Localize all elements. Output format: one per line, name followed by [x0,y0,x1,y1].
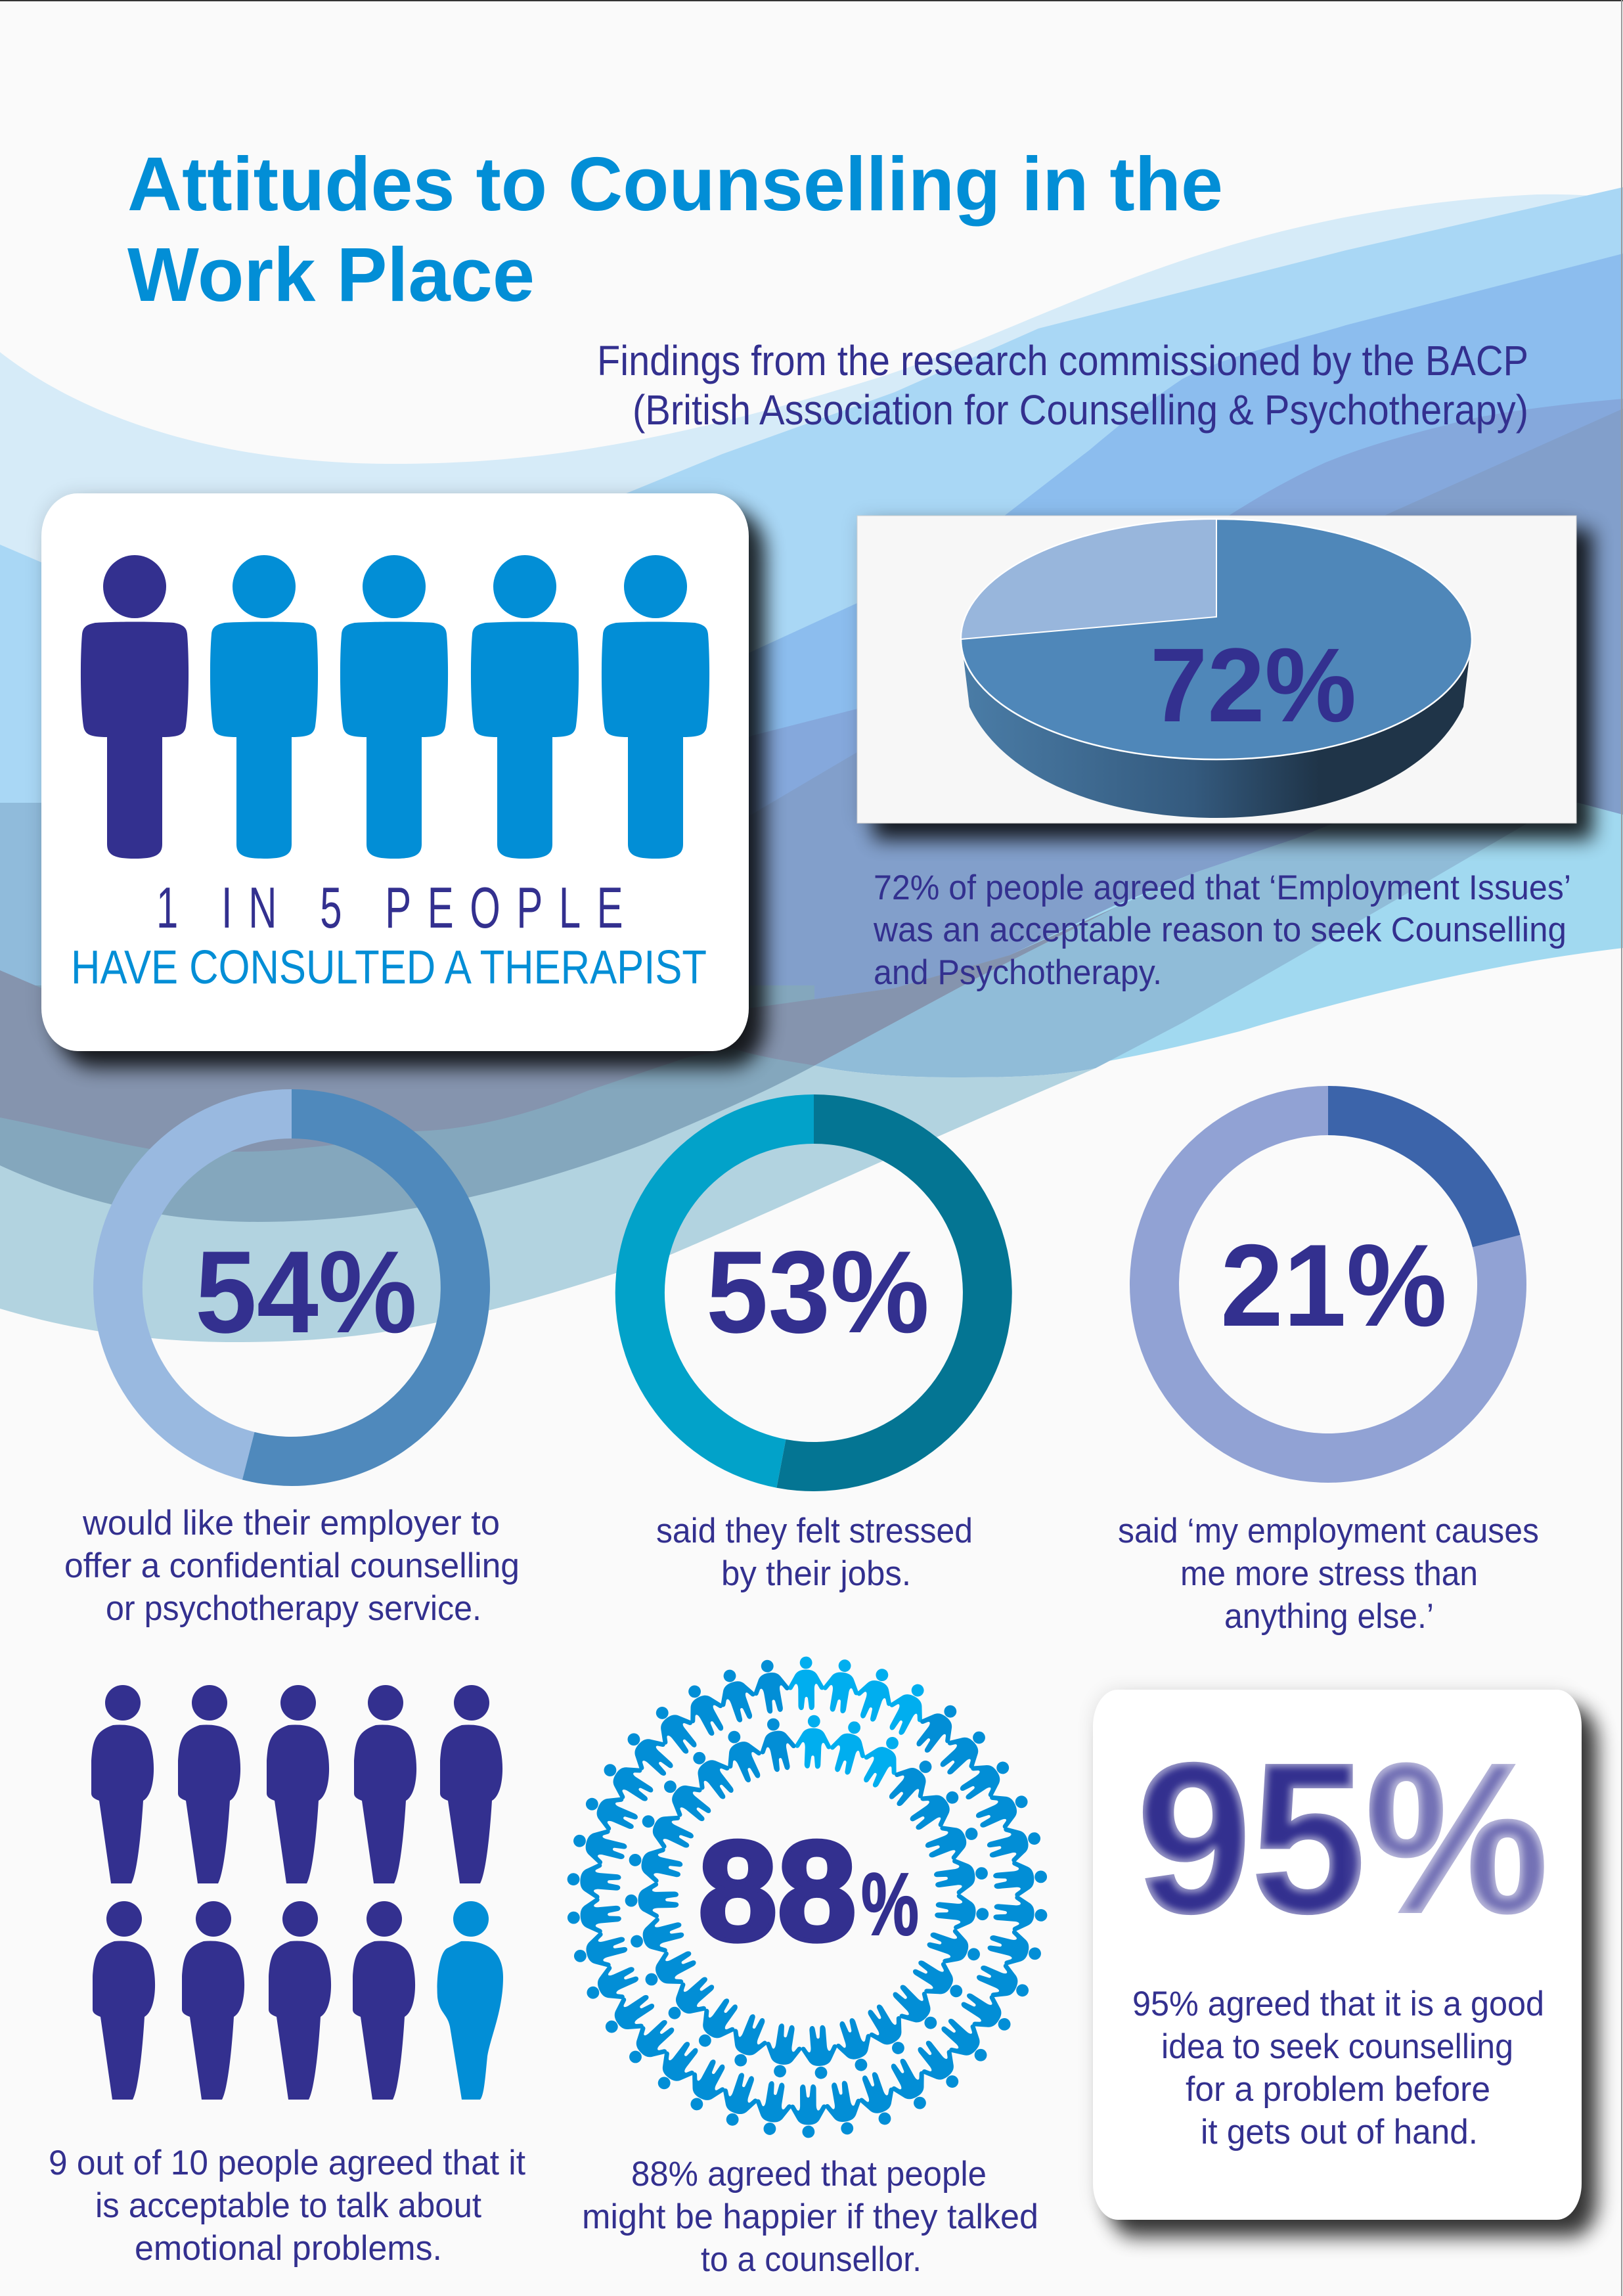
text: 72% description: 72% of people agreed that ‘Employment Issues’ [874,868,1571,907]
panel: 1 in 5 people card [41,493,765,1068]
text: 21% caption: anything else.’ [1224,1597,1434,1636]
text: 53% caption [656,1512,973,1593]
text: 95% description: idea to seek counselling [1161,2027,1513,2066]
donut chart: 54% [93,1089,490,1486]
text: 53% caption: by their jobs. [721,1554,911,1593]
percent sign: % [861,1855,919,1954]
text: 88% caption: to a counsellor. [701,2240,922,2279]
text: 95% description: it gets out of hand. [1201,2113,1478,2151]
subtitle: (British Association for Counselling & Psychotherapy) [633,386,1528,434]
pie chart top [961,519,1472,759]
subtitle [597,337,1528,434]
subheading: have consulted a therapist: HAVE CONSULTED A THERAPIST [71,941,707,994]
top border line [0,0,1623,1]
title [127,141,1223,317]
pie value: 72% [1150,626,1356,744]
panel: 72% pie chart [857,516,1593,840]
text: 21% caption [1118,1512,1539,1636]
background waves [0,187,1623,1342]
text: 9 out of 10 caption [49,2144,525,2268]
text: 95% description: for a problem before [1186,2070,1490,2109]
subtitle: Findings from the research commissioned by the BACP [597,337,1528,384]
pie chart light wedge [961,519,1216,639]
text: 88% caption: 88% agreed that people [631,2155,987,2194]
text: 9 out of 10 caption: is acceptable to talk about [95,2186,481,2225]
title: Work Place [127,232,535,317]
text: 95% description [1132,1985,1544,2151]
text: 21% caption: me more stress than [1180,1554,1478,1593]
right border line [1621,0,1622,2296]
pie chart side [962,647,1471,818]
donut chart: 21%: 21% [1220,1220,1447,1351]
text: 54% caption: or psychotherapy service. [106,1589,481,1628]
text: 72% description: and Psychotherapy. [874,953,1162,992]
panel: 95% card [1093,1690,1597,2237]
text: 21% caption: said ‘my employment causes [1118,1512,1539,1550]
text: 9 out of 10 caption: emotional problems. [135,2229,442,2268]
icon: two rings of people with 88% [566,1656,1048,2138]
title: Attitudes to Counselling in the [127,141,1223,227]
inner ring of people [625,1715,990,2081]
outer ring of people [566,1656,1048,2138]
donut chart: 53%: 53% [706,1227,929,1357]
text: 72% description: was an acceptable reason to seek Counselling [873,911,1567,949]
text: 54% caption [64,1504,520,1628]
text: 88% caption [582,2155,1038,2279]
text: 88% caption: might be happier if they talked [582,2197,1038,2236]
big 95% value: 95% [1137,1719,1548,1957]
text: 54% caption: would like their employer to [82,1504,500,1542]
88 value: 88 [698,1811,856,1970]
donut chart: 53% [615,1094,1012,1491]
text: 95% description: 95% agreed that it is a good [1132,1985,1544,2023]
icon: ten people, nine dark one blue [91,1685,503,2100]
text: 9 out of 10 caption: 9 out of 10 people agreed that it [49,2144,525,2182]
text: 53% caption: said they felt stressed [656,1512,973,1550]
icon: five people [81,555,709,859]
donut chart: 54%: 54% [195,1227,417,1357]
text: 54% caption: offer a confidential counselling [64,1546,520,1585]
text: 72% description [873,868,1571,992]
heading: 1 in 5 people: 1 IN 5 PEOPLE [156,875,623,940]
donut chart: 21% [1130,1086,1526,1483]
